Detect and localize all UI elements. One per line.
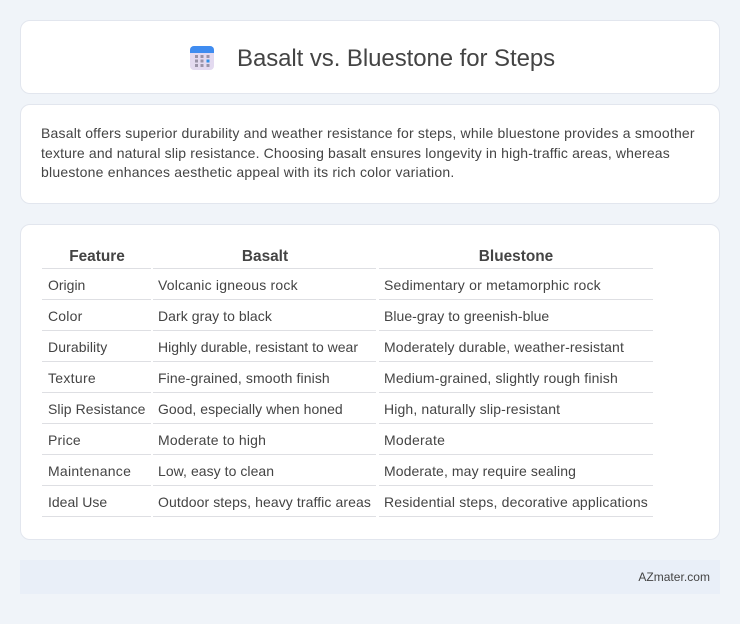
- comparison table: Dark gray to black: [158, 308, 272, 324]
- comparison table: Moderate: [384, 432, 445, 448]
- intro panel: [20, 104, 720, 204]
- comparison table: Moderate, may require sealing: [384, 463, 576, 479]
- comparison table: Maintenance: [48, 463, 131, 479]
- header panel: [20, 20, 720, 94]
- comparison table: Origin: [48, 277, 85, 293]
- comparison table: Basalt: [242, 248, 288, 265]
- comparison table: Sedimentary or metamorphic rock: [384, 277, 601, 293]
- comparison table: Highly durable, resistant to wear: [158, 339, 358, 355]
- row: Ideal Use: [42, 494, 653, 517]
- comparison table: Color: [48, 308, 82, 324]
- comparison table: Texture: [48, 370, 96, 386]
- comparison table: Ideal Use: [48, 494, 107, 510]
- comparison table: Blue-gray to greenish-blue: [384, 308, 549, 324]
- comparison table: Low, easy to clean: [158, 463, 274, 479]
- comparison table: Volcanic igneous rock: [158, 277, 298, 293]
- comparison table: Durability: [48, 339, 107, 355]
- comparison table: Feature: [69, 248, 125, 265]
- row: Slip Resistance: [42, 401, 653, 424]
- icon: calendar: [190, 46, 214, 70]
- column headings: [42, 248, 653, 269]
- comparison table: Bluestone: [479, 248, 553, 265]
- comparison table panel: [20, 224, 720, 540]
- row: Origin: [42, 277, 653, 300]
- row: Texture: [42, 370, 653, 393]
- comparison table: Medium-grained, slightly rough finish: [384, 370, 618, 386]
- comparison table: Fine-grained, smooth finish: [158, 370, 330, 386]
- comparison table: High, naturally slip-resistant: [384, 401, 560, 417]
- comparison table: Price: [48, 432, 81, 448]
- comparison table: Good, especially when honed: [158, 401, 343, 417]
- comparison table: Outdoor steps, heavy traffic areas: [158, 494, 371, 510]
- intro text: texture and natural slip resistance. Choosing basalt ensures longevity in high-traffic areas, whereas: [41, 144, 670, 160]
- footer credit: AZmater.com: [638, 570, 710, 584]
- footer bar: [20, 560, 720, 594]
- intro text: Basalt offers superior durability and weather resistance for steps, while bluestone provides a smoother: [41, 125, 695, 141]
- row: Color: [42, 308, 653, 331]
- intro text: bluestone enhances aesthetic appeal with its rich color variation.: [41, 164, 454, 180]
- comparison table: Moderately durable, weather-resistant: [384, 339, 624, 355]
- row: Durability: [42, 339, 653, 362]
- row: Maintenance: [42, 463, 653, 486]
- comparison table: Slip Resistance: [48, 401, 146, 417]
- title: Basalt vs. Bluestone for Steps: [237, 45, 555, 72]
- row: Price: [42, 432, 653, 455]
- intro text: [41, 125, 695, 180]
- comparison table: Residential steps, decorative applications: [384, 494, 648, 510]
- comparison table: Moderate to high: [158, 432, 266, 448]
